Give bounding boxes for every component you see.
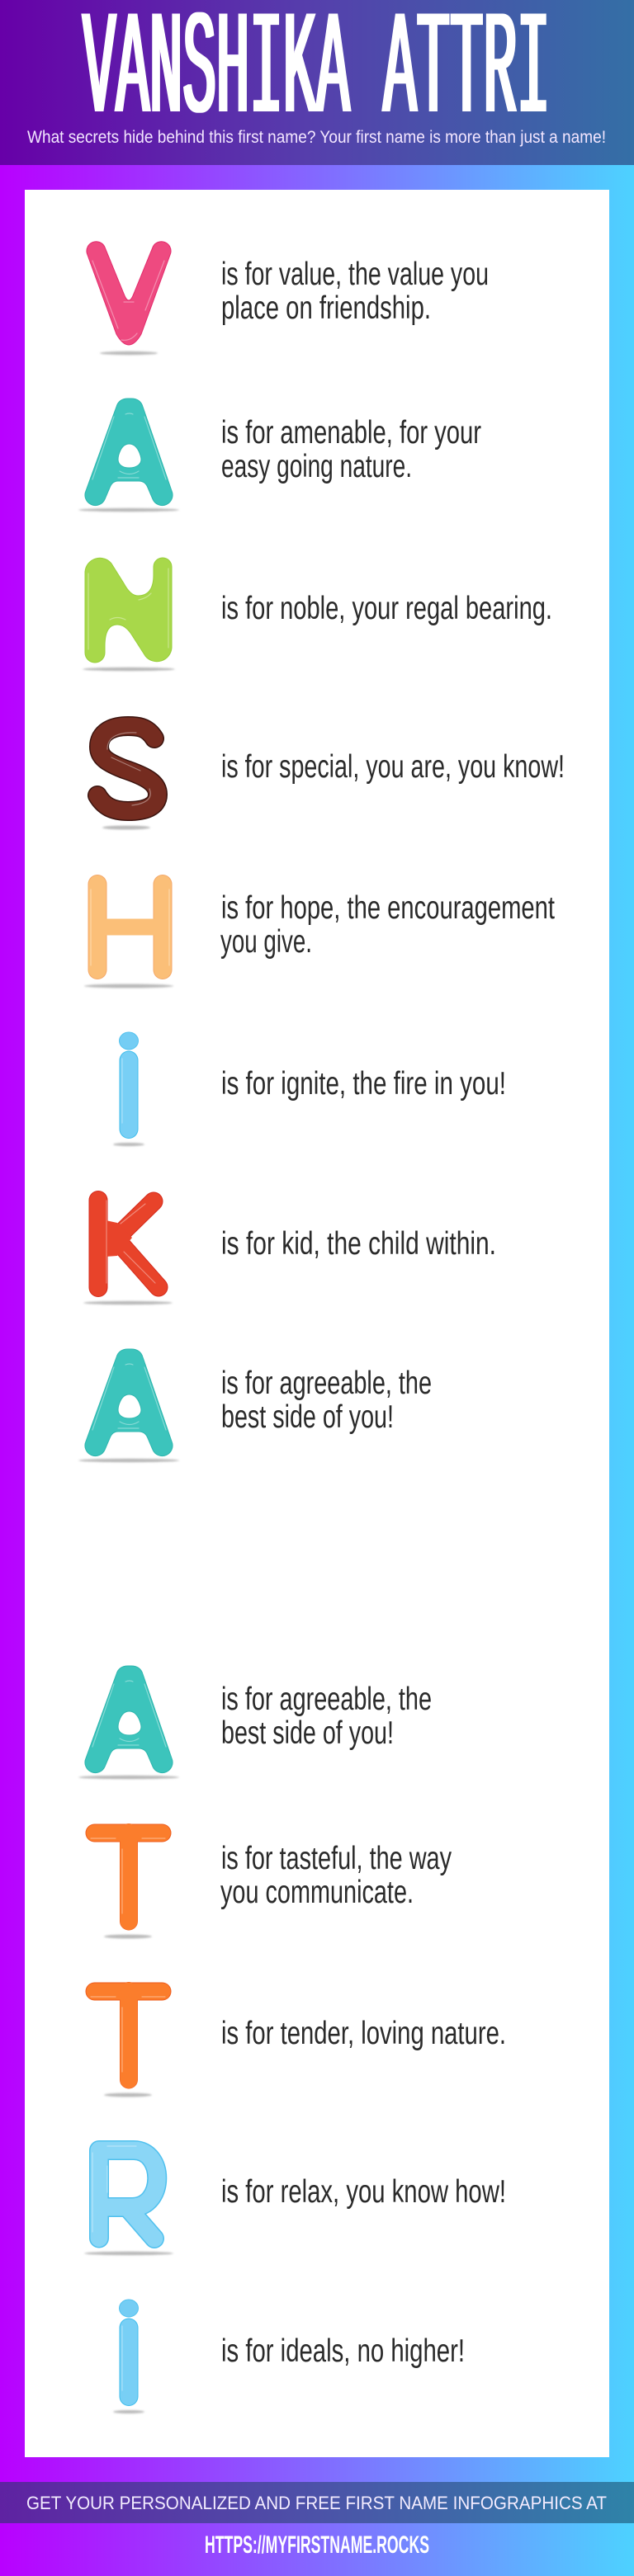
row: H <box>84 885 555 988</box>
icon: letter A <box>78 1666 179 1779</box>
footer url: HTTPS://MYFIRSTNAME.ROCKS <box>205 2531 429 2559</box>
icon: letter A <box>78 399 179 512</box>
text: H <box>220 890 555 960</box>
icon: letter N <box>83 558 175 671</box>
text: A <box>221 1366 432 1435</box>
footer band <box>0 2482 634 2523</box>
row: T second <box>91 1991 506 2097</box>
header band <box>0 0 634 165</box>
text: H: you give. <box>220 924 312 960</box>
text: T: you communicate. <box>220 1875 414 1910</box>
text: V <box>221 257 489 326</box>
text: V: is for value, the value you <box>221 257 489 292</box>
icon: letter i <box>113 1032 144 1146</box>
row: A (first name end) <box>78 1349 432 1462</box>
text: T: is for tasteful, the way <box>221 1841 452 1876</box>
text: A: is for agreeable, the <box>221 1366 432 1401</box>
icon: letter R <box>84 2146 173 2255</box>
text: K: is for kid, the child within. <box>221 1226 496 1262</box>
row: N <box>83 558 552 671</box>
text: A <box>221 1682 432 1751</box>
icon: letter i <box>113 2300 144 2413</box>
row: I <box>113 1032 506 1146</box>
icon: letter A <box>78 1349 179 1462</box>
row: T <box>91 1833 452 1938</box>
text: I: is for ideals, no higher! <box>221 2333 465 2369</box>
text: I: is for ignite, the fire in you! <box>221 1066 506 1102</box>
text: A: is for amenable, for your <box>221 415 481 451</box>
row: S <box>97 726 565 829</box>
text: A: easy going nature. <box>221 449 412 484</box>
icon: letter K <box>83 1200 173 1305</box>
text: A: best side of you! <box>221 1399 394 1435</box>
text: A: is for agreeable, the <box>221 1682 432 1717</box>
text: A: best side of you! <box>221 1715 394 1751</box>
icon: letter H <box>84 885 173 988</box>
row: K <box>83 1200 496 1305</box>
text: T <box>220 1841 452 1910</box>
icon: letter S <box>97 726 158 829</box>
row: A <box>78 399 481 512</box>
text: R: is for relax, you know how! <box>221 2174 506 2210</box>
icon: letter V <box>87 242 171 355</box>
icon: letter T <box>91 1833 165 1938</box>
row: R <box>84 2146 506 2255</box>
footer call to action: GET YOUR PERSONALIZED AND FREE FIRST NAME INFOGRAPHICS AT <box>26 2493 607 2513</box>
row: V <box>87 242 489 355</box>
row: A (surname) <box>78 1666 432 1779</box>
text: A <box>221 415 481 484</box>
icon: letter T <box>91 1991 165 2097</box>
text: V: place on friendship. <box>221 290 431 326</box>
row: I last <box>113 2300 465 2413</box>
text: T: is for tender, loving nature. <box>221 2016 506 2051</box>
